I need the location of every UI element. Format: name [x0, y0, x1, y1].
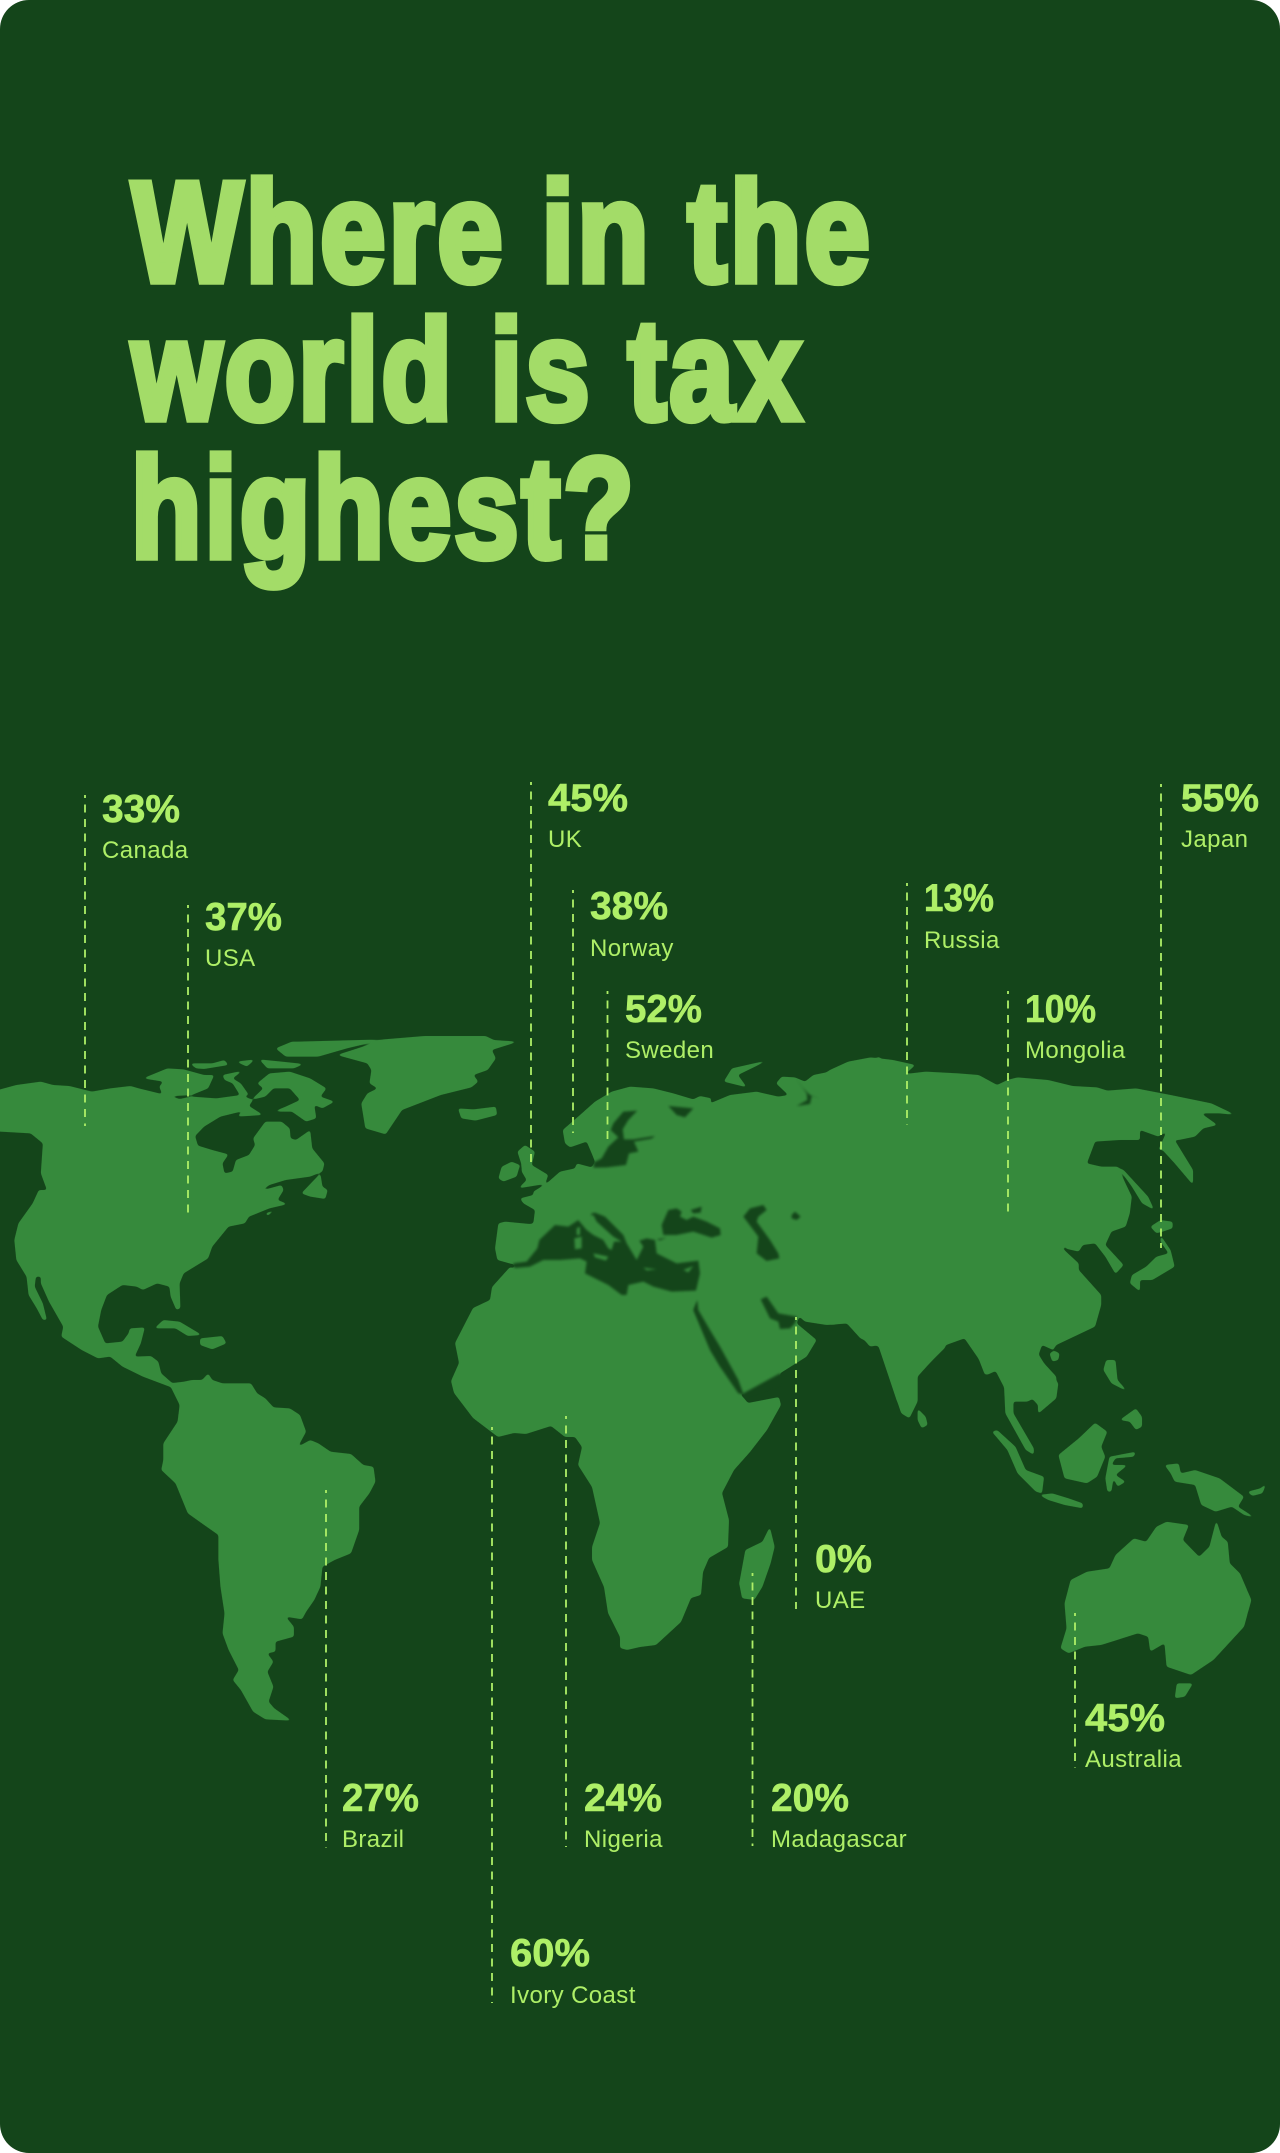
- label: Brazil 27%: [326, 1490, 419, 1853]
- label: Australia 45%: [1075, 1613, 1182, 1773]
- label: Ivory Coast 60%: 60%: [510, 1932, 590, 1975]
- label: Sweden 52%: [608, 988, 714, 1140]
- label: UK 45%: UK: [548, 826, 582, 853]
- label: Japan 55%: [1161, 777, 1259, 1248]
- label: Russia 13%: 13%: [924, 877, 994, 920]
- title: world is tax: [131, 291, 804, 450]
- label: Mongolia 10%: [1008, 988, 1126, 1215]
- label: Brazil 27%: Brazil: [342, 1826, 404, 1853]
- label: Norway 38%: 38%: [590, 885, 668, 928]
- label: UAE 0%: UAE: [815, 1587, 866, 1614]
- label: UK 45%: [531, 777, 628, 1167]
- label: Norway 38%: Norway: [590, 935, 674, 962]
- label: Ivory Coast 60%: [492, 1427, 636, 2009]
- label: UAE 0%: [796, 1317, 872, 1614]
- label: USA 37%: 37%: [205, 896, 282, 939]
- label: USA 37%: USA: [205, 945, 256, 972]
- Eurasia west, Arabia: [495, 1057, 880, 1393]
- label: Japan 55%: 55%: [1181, 777, 1259, 820]
- title: [131, 153, 873, 588]
- label: Canada 33%: [85, 788, 189, 1126]
- label: Mongolia 10%: Mongolia: [1025, 1037, 1126, 1064]
- label: Russia 13%: [907, 877, 1000, 1125]
- title: Where in the: [132, 153, 873, 312]
- Asia east: [724, 1057, 1236, 1402]
- title: highest?: [131, 429, 637, 588]
- label: UK 45%: 45%: [548, 777, 628, 820]
- label: Madagascar 20%: 20%: [771, 1777, 849, 1820]
- world map: [0, 1036, 1267, 1721]
- label: Nigeria 24%: Nigeria: [584, 1826, 663, 1853]
- inland seas: [513, 1077, 821, 1398]
- label: Australia 45%: 45%: [1085, 1697, 1165, 1740]
- label: Nigeria 24%: 24%: [584, 1777, 662, 1820]
- label: Australia 45%: Australia: [1085, 1746, 1182, 1773]
- label: Ivory Coast 60%: Ivory Coast: [510, 1982, 636, 2009]
- Africa: [451, 1250, 781, 1650]
- label: Nigeria 24%: [566, 1416, 663, 1853]
- label: Brazil 27%: 27%: [342, 1777, 419, 1820]
- label: Madagascar 20%: Madagascar: [771, 1826, 907, 1853]
- label: Russia 13%: Russia: [924, 927, 1000, 954]
- islands over seas: [574, 1167, 1175, 1362]
- label: USA 37%: [188, 896, 282, 1213]
- label: Norway 38%: [573, 885, 674, 1133]
- label: Japan 55%: Japan: [1181, 826, 1248, 853]
- South America: [161, 1373, 376, 1721]
- label: Sweden 52%: Sweden: [625, 1037, 714, 1064]
- label: UAE 0%: 0%: [815, 1538, 872, 1581]
- Indian Ocean and Oceania landmasses: [739, 1343, 1267, 1698]
- label: Canada 33%: Canada: [102, 837, 189, 864]
- label: Madagascar 20%: [752, 1573, 907, 1853]
- label: Canada 33%: 33%: [102, 788, 180, 831]
- label: Sweden 52%: 52%: [625, 988, 702, 1031]
- label: Mongolia 10%: 10%: [1025, 988, 1096, 1031]
